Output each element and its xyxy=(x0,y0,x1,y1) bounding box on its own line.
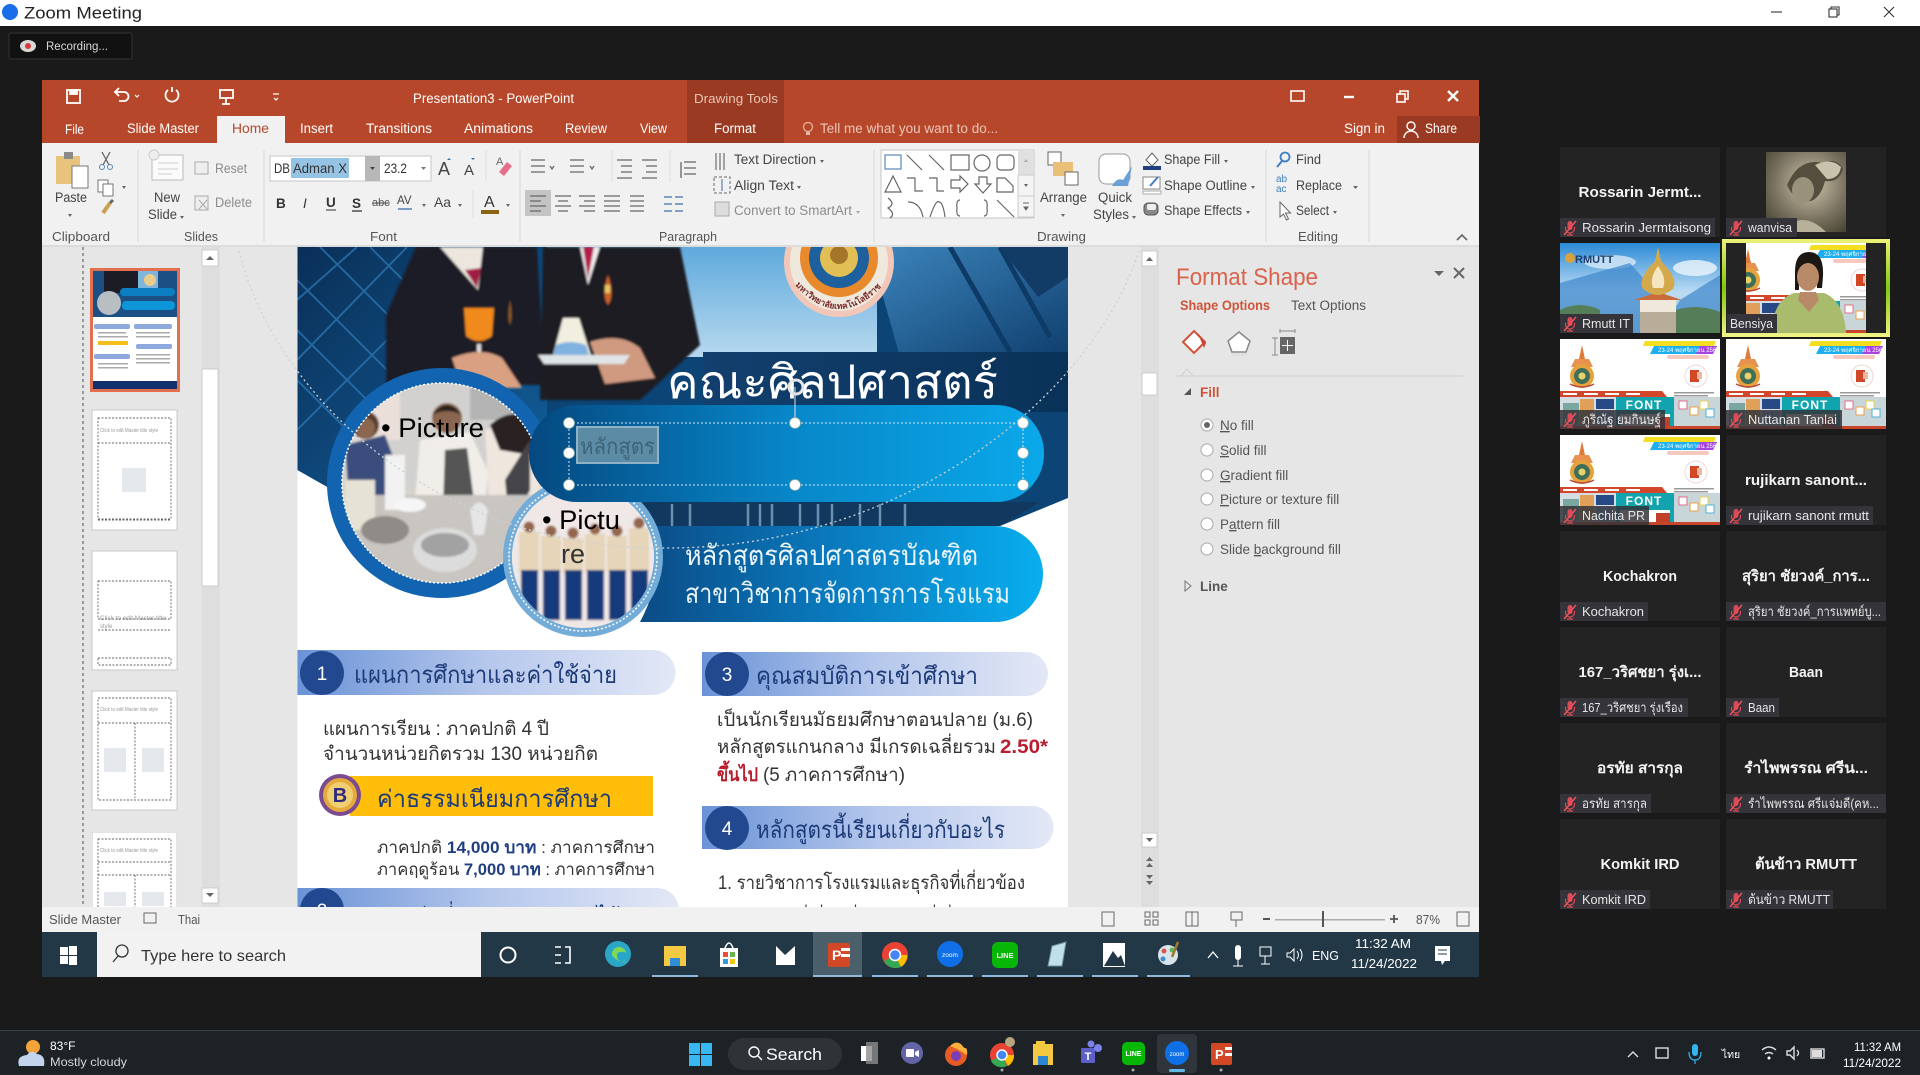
font group: I xyxy=(303,196,307,211)
icon: zoom logo xyxy=(2,4,18,20)
shape commands xyxy=(1143,152,1255,218)
university seal: มหาวิทยาลัยเทคโนโลยีราชมงคล xyxy=(796,282,881,310)
dotted selection ellipse xyxy=(239,251,1139,548)
ribbon title bar: Format xyxy=(714,121,756,136)
window controls xyxy=(1771,7,1894,17)
quick access icons xyxy=(67,87,279,104)
thumbnail 5 xyxy=(92,832,177,907)
inner windows taskbar xyxy=(42,932,1479,977)
font group: A xyxy=(464,162,474,179)
font group: Aa xyxy=(434,194,451,210)
inner windows taskbar: P xyxy=(832,947,841,963)
tray xyxy=(1208,936,1450,971)
paragraph group xyxy=(525,150,860,218)
tile: slide feed 2: 23-24 พฤศจิกายน 2565 xyxy=(1824,347,1886,354)
tuition fees xyxy=(377,839,655,880)
thumbnail 4 xyxy=(92,691,177,810)
tuition banner: B xyxy=(333,785,347,807)
program title xyxy=(686,542,1008,603)
pinned apps: zoom xyxy=(1170,1052,1184,1058)
lower building strip xyxy=(640,502,1040,526)
program title: หลักสูตรศิลปศาสตรบัณฑิต xyxy=(685,540,978,573)
tile: slide feed 2: Nuttanan Tanlai xyxy=(1748,412,1837,427)
ribbon title bar: Share xyxy=(1425,121,1457,136)
tile: slide feed 2: FONT xyxy=(1792,398,1828,412)
font group: AV xyxy=(397,195,412,207)
system tray: 11:32 AM xyxy=(1854,1040,1901,1054)
inner windows taskbar: Type here to search xyxy=(141,948,286,965)
running indicators xyxy=(652,975,1190,977)
tile: Bensiya active speaker: Bensiya xyxy=(1730,316,1774,331)
ribbon xyxy=(42,143,1479,247)
line section: Line xyxy=(1200,579,1228,594)
tile: Kochakron: Kochakron xyxy=(1582,604,1644,619)
paragraph group: Align Text xyxy=(734,178,794,193)
tile: Tonkhao: ต้นข้าว RMUTT xyxy=(1755,856,1857,873)
pane title: Format Shape xyxy=(1176,264,1318,291)
system tray xyxy=(1628,1040,1901,1070)
shapes gallery xyxy=(881,150,1034,218)
font group: B xyxy=(276,196,286,211)
pinned apps: T xyxy=(1085,1051,1092,1063)
document title: Presentation3 - PowerPoint xyxy=(413,91,574,106)
tile: Baan: Baan xyxy=(1789,664,1823,681)
powerpoint status bar xyxy=(42,907,1479,932)
font group: A xyxy=(496,156,504,168)
section 3 body: ขึ้นไป xyxy=(717,760,758,786)
tile: rujikarn: rujikarn sanont... xyxy=(1745,472,1867,489)
inner windows taskbar: zoom xyxy=(942,952,958,959)
hotel staff photo xyxy=(386,247,700,400)
quick styles button: Quick xyxy=(1098,190,1132,205)
thumbnail scrollbar xyxy=(202,247,220,907)
fill section: Slide background fill xyxy=(1220,542,1341,557)
tile: Rossarin: Rossarin Jermtaisong xyxy=(1582,220,1711,235)
system tray: 11/24/2022 xyxy=(1843,1056,1901,1070)
slide thumbnail pane xyxy=(82,247,218,907)
section 4 heading: 4 xyxy=(722,819,733,840)
tile: Rossarin xyxy=(1560,147,1720,237)
clipboard group: Paste xyxy=(55,190,87,205)
search pill xyxy=(728,1038,842,1070)
font group: DB xyxy=(274,161,290,176)
section 1 body: แผนการเรียน : ภาคปกติ 4 ปี xyxy=(323,718,549,740)
header background photo xyxy=(297,247,1068,526)
font group: abc xyxy=(372,197,390,209)
section 3 body: หลักสูตรแกนกลาง มีเกรดเฉลี่ยรวม xyxy=(717,733,996,758)
pane icons xyxy=(1183,329,1295,356)
ribbon title bar: Transitions xyxy=(366,121,432,136)
tile: Rmutt IT: Rmutt IT xyxy=(1582,316,1630,331)
tile: Tonkhao: ต้นข้าว RMUTT xyxy=(1748,892,1830,907)
pinned apps xyxy=(813,932,862,977)
tile: slide feed 3 xyxy=(1560,435,1720,525)
tile: Komkit: Komkit IRD xyxy=(1600,856,1680,873)
shape commands: Shape Outline xyxy=(1164,178,1247,193)
thumbnail 3 xyxy=(92,551,177,670)
section 3 body: 2.50* xyxy=(1000,737,1049,758)
section 4 body: 1. รายวิชาการโรงแรมและธุรกิจที่เกี่ยวข้อง xyxy=(718,869,1025,895)
picture placeholder 1: • Picture xyxy=(381,413,484,443)
shape commands: Shape Effects xyxy=(1164,203,1242,218)
powerpoint status bar: Thai xyxy=(178,912,200,927)
fill section: Picture or texture fill xyxy=(1220,492,1339,507)
picture placeholder 2: • Pictu xyxy=(542,505,620,535)
tile: wanvisa: wanvisa xyxy=(1747,220,1793,235)
tile: Rmutt IT: RMUTT xyxy=(1575,254,1614,266)
window title: Zoom Meeting xyxy=(24,4,142,22)
tile: Komkit: Komkit IRD xyxy=(1582,892,1646,907)
editing group xyxy=(1276,152,1467,240)
format shape pane xyxy=(1160,247,1479,907)
section 4 body: รายวิชาที่เกี่ยวเนื่องกับการที่เกี่ยวข้อง xyxy=(740,904,1000,929)
section 3 body: เป็นนักเรียนมัธยมศึกษาตอนปลาย (ม.6) xyxy=(717,707,1033,731)
fill section: Gradient fill xyxy=(1220,468,1288,483)
thumbnail 5: Click to edit Master title style xyxy=(100,848,158,854)
thumbnail 3: Click to edit Master title xyxy=(100,616,167,622)
fill section: No fill xyxy=(1220,418,1254,433)
ribbon title bar: Tell me what you want to do... xyxy=(820,121,998,136)
paragraph group: Convert to SmartArt xyxy=(734,203,852,218)
fill section: Pattern fill xyxy=(1220,517,1280,532)
participant panel xyxy=(1560,147,1890,909)
ribbon title bar: Home xyxy=(232,121,269,136)
ribbon title bar: Animations xyxy=(464,121,533,136)
tile: Baan: Baan xyxy=(1748,700,1775,715)
editing group: Select xyxy=(1296,203,1329,218)
tile: slide feed 2 xyxy=(1726,339,1886,429)
section 1 heading xyxy=(298,650,676,695)
fill section: Fill xyxy=(1200,385,1220,400)
recording badge xyxy=(9,33,132,59)
ribbon: Paragraph xyxy=(659,230,717,244)
tile: rujikarn xyxy=(1726,435,1886,525)
ribbon: Font xyxy=(370,230,398,244)
PowerPoint window xyxy=(42,80,1480,977)
tile: Suriya: สุริยา ชัยวงค์_การ... xyxy=(1742,567,1870,586)
ribbon title bar: View xyxy=(640,121,667,136)
tile: wanvisa xyxy=(1726,147,1886,237)
font group: A xyxy=(484,194,495,211)
pinned apps xyxy=(861,1034,1232,1073)
section 1 body xyxy=(324,718,597,760)
weather widget: 83°F xyxy=(50,1039,75,1053)
tile: Baan xyxy=(1726,627,1886,717)
search pill: Search xyxy=(766,1045,822,1064)
tile: slide feed 3: 23-24 พฤศจิกายน 2565 xyxy=(1658,443,1720,450)
tile: 167: 167_วริศชยา รุ่งเ... xyxy=(1578,663,1702,682)
powerpoint status bar: Slide Master xyxy=(49,912,122,927)
tell me box xyxy=(804,122,812,132)
slides group: New xyxy=(154,190,180,205)
arrange button: Arrange xyxy=(1040,190,1087,205)
tile: Kochakron: Kochakron xyxy=(1603,568,1677,585)
fill section: Solid fill xyxy=(1220,443,1267,458)
section 2 heading xyxy=(298,888,679,907)
program title: สาขาวิชาการจัดการการโรงแรม xyxy=(685,577,1010,609)
picture placeholder 2: re xyxy=(561,539,585,569)
slides group: Slide xyxy=(148,207,177,222)
thumbnail 4: Click to edit Master title style xyxy=(100,707,158,713)
ribbon title bar: Drawing Tools xyxy=(694,91,779,106)
section 4 body xyxy=(719,870,1024,907)
faculty title: คณะศิลปศาสตร์ xyxy=(667,356,998,408)
ribbon: Drawing xyxy=(1037,230,1086,244)
font group: 23.2 xyxy=(384,161,407,176)
tuition fees: ภาคปกติ 14,000 บาท : ภาคการศึกษา xyxy=(377,839,655,857)
slides group: Reset xyxy=(215,161,247,176)
tile: Orathai xyxy=(1560,723,1720,813)
shape commands: Shape Fill xyxy=(1164,152,1220,167)
ribbon title bar: Insert xyxy=(300,121,333,136)
clipboard group xyxy=(55,152,126,217)
tile: slide feed 1: ภูริณัฐ ยมกินษฐ์ xyxy=(1582,412,1661,428)
ribbon: Editing xyxy=(1298,230,1338,244)
circle photo: kitchen xyxy=(327,368,557,598)
slide: brochure xyxy=(298,247,1068,907)
tile: Bensiya active speaker xyxy=(1722,239,1890,337)
thumbnail 3: style xyxy=(100,624,113,630)
section 2 heading: 2 xyxy=(317,901,327,922)
editing group: Replace xyxy=(1296,178,1342,193)
quick styles button xyxy=(1093,154,1136,222)
tile: Rampaipan xyxy=(1726,723,1886,813)
tile: Suriya: สุริยา ชัยวงค์_การแพทย์บู... xyxy=(1748,604,1881,620)
tile: Orathai: อรทัย สารกุล xyxy=(1582,796,1647,812)
tray: ENG xyxy=(1312,948,1339,963)
font group: Adman X xyxy=(293,161,347,176)
tile: Bensiya active speaker: 23-24 พฤศจิกายน 2565 xyxy=(1824,251,1886,258)
selected text box: หลักสูตร xyxy=(580,434,655,460)
circle photo: students xyxy=(503,477,663,637)
thumbnail 1 active slide xyxy=(90,268,180,392)
tuition banner xyxy=(319,774,653,816)
system tray: ไทย xyxy=(1721,1048,1740,1061)
Zoom title bar xyxy=(0,0,1920,26)
recording badge: Recording... xyxy=(46,41,108,53)
program pill xyxy=(640,526,1043,622)
tile: slide feed 3: Nachita PR xyxy=(1582,508,1645,523)
font group: S xyxy=(352,196,361,211)
university seal xyxy=(784,247,894,317)
sign in and share: Sign in xyxy=(1344,121,1385,136)
pane tabs: Shape Options xyxy=(1180,298,1270,313)
ribbon title bar: Review xyxy=(565,121,607,136)
tile: Rossarin: Rossarin Jermt... xyxy=(1578,184,1702,201)
ribbon title bar: Slide Master xyxy=(127,121,199,136)
tile: slide feed 1: 23-24 พฤศจิกายน 2565 xyxy=(1658,347,1720,354)
tile: Komkit xyxy=(1560,819,1720,909)
editing group: Find xyxy=(1296,152,1321,167)
tile: 167: 167_วริศชยา รุ่งเรือง xyxy=(1582,700,1683,716)
tile: slide feed 3: FONT xyxy=(1626,494,1662,508)
section 1 body: จำนวนหน่วยกิตรวม 130 หน่วยกิต xyxy=(323,744,598,765)
section 4 heading xyxy=(702,806,1054,850)
slide editing canvas xyxy=(222,247,1141,907)
ribbon: Slides xyxy=(184,230,218,244)
section 3 heading: คุณสมบัติการเข้าศึกษา xyxy=(756,663,978,691)
ribbon title bar xyxy=(42,80,1480,143)
start button xyxy=(60,946,77,965)
slide scrollbar xyxy=(1141,247,1159,907)
selected text box xyxy=(564,380,1028,490)
section 3 heading xyxy=(702,652,1048,696)
search box xyxy=(97,932,481,977)
format shape pane: Text Options xyxy=(1291,298,1366,313)
tile: Orathai: อรทัย สารกุล xyxy=(1597,760,1683,778)
pinned apps: LINE xyxy=(1126,1051,1142,1058)
arrange button xyxy=(1040,152,1087,217)
powerpoint status bar: 87% xyxy=(1416,913,1440,927)
tile: Kochakron xyxy=(1560,531,1720,621)
tile: 167 xyxy=(1560,627,1720,717)
font group: A xyxy=(438,159,450,179)
top pill xyxy=(529,405,1044,502)
section 1 heading: 1 xyxy=(317,664,327,685)
start button xyxy=(689,1043,712,1066)
tile: Suriya xyxy=(1726,531,1886,621)
section 3 body xyxy=(717,707,1049,786)
inner windows taskbar: LINE xyxy=(996,951,1014,960)
group labels: Clipboard xyxy=(52,230,110,244)
outer windows taskbar xyxy=(0,1030,1920,1075)
font group: U xyxy=(326,195,336,210)
thumbnail 2 xyxy=(92,410,177,530)
section 1 heading: แผนการศึกษาและค่าใช้จ่าย xyxy=(354,661,617,689)
tuition fees: ภาคฤดูร้อน 7,000 บาท : ภาคการศึกษา xyxy=(377,861,655,880)
font group xyxy=(270,150,512,218)
weather widget: Mostly cloudy xyxy=(50,1055,127,1069)
editing group: ab xyxy=(1276,174,1288,185)
window buttons xyxy=(1291,91,1458,102)
tray: 11/24/2022 xyxy=(1351,956,1417,971)
drawing tools tab xyxy=(687,80,784,143)
tuition banner: ค่าธรรมเนียมการศึกษา xyxy=(377,786,612,813)
tile: Tonkhao xyxy=(1726,819,1886,909)
section 4 heading: หลักสูตรนี้เรียนเกี่ยวกับอะไร xyxy=(756,812,1005,845)
weather widget xyxy=(18,1039,127,1069)
thumbnail 2: Click to edit Master title style xyxy=(100,428,158,434)
section 2 heading: อาชีพที่สามารถประกอบได้ xyxy=(390,901,620,932)
slides group: Delete xyxy=(215,195,252,210)
tile: Rampaipan: รำไพพรรณ ศรีน... xyxy=(1744,758,1868,777)
tile: Rmutt IT xyxy=(1560,243,1720,333)
picture placeholder 2 xyxy=(543,510,618,564)
tile: slide feed 1 xyxy=(1560,339,1720,429)
editing group: ac xyxy=(1276,184,1287,195)
tray: 11:32 AM xyxy=(1355,936,1411,951)
section 3 heading: 3 xyxy=(722,665,732,686)
fill section xyxy=(1184,385,1341,557)
tile: rujikarn: rujikarn sanont rmutt xyxy=(1748,508,1869,523)
section 3 body: (5 ภาคการศึกษา) xyxy=(763,765,905,786)
ribbon tabs: File xyxy=(65,122,84,137)
tile: slide feed 1: FONT xyxy=(1626,398,1662,412)
quick styles button: Styles xyxy=(1093,207,1129,222)
slides group xyxy=(148,150,252,222)
presenter xyxy=(1772,252,1846,333)
paragraph group: Text Direction xyxy=(734,152,816,167)
tile: Rampaipan: รำไพพรรณ ศรีแจ่มดี(คห... xyxy=(1748,796,1879,811)
pinned apps: P xyxy=(1215,1047,1224,1062)
line section xyxy=(1185,579,1228,594)
